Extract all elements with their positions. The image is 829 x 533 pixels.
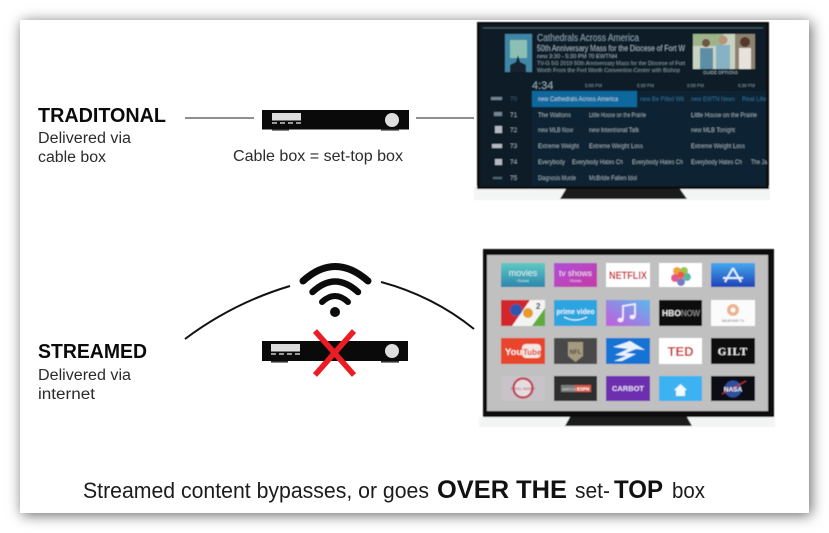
app tile: Netflix (606, 263, 650, 287)
text: delivered via cable box: Delivered via (38, 130, 131, 147)
guide listing rows: Extreme Weight Loss (589, 143, 644, 150)
app tile: app store (711, 263, 755, 287)
highlighted guide row: new Cathedrals Across America (538, 96, 618, 103)
app tile: prime video (554, 300, 597, 326)
guide options label: GUIDE OPTIONS (703, 70, 738, 75)
app tile: YouTube: Tube (523, 348, 542, 357)
guide listing rows (538, 112, 767, 182)
app tile: YouTube: You (505, 347, 522, 358)
app tile: movies: iTunes (517, 278, 529, 283)
app tile: NFL: NFL (570, 350, 582, 356)
bottom statement: set- (575, 478, 610, 503)
guide header text: TV-G 5G 2019 50th Anniversary Mass for the Diocese of Fort (537, 61, 686, 67)
guide clock and time row: 4:34 (532, 80, 553, 92)
channel numbers: 73 (510, 143, 518, 150)
channel numbers: 70 (510, 96, 518, 103)
guide listing rows: Extreme Weight Loss (691, 143, 746, 150)
bottom statement (83, 476, 706, 504)
bottom statement: OVER THE (437, 476, 567, 504)
connector line: cable box to TV (416, 117, 474, 119)
app tile: Rooster (711, 300, 755, 326)
caption: cable box equals set-top box: Cable box = set-top box (233, 148, 403, 165)
app tile: Netflix: NETFLIX (609, 270, 648, 282)
text: delivered via internet: Delivered via (38, 367, 131, 384)
guide clock and time row: 6:30 PM (738, 83, 755, 88)
preview photo (693, 34, 755, 69)
channel numbers: 72 (510, 127, 518, 134)
guide header text: 50th Anniversary Mass for the Diocese of Fort W (537, 44, 685, 53)
guide clock and time row: 5:30 PM (637, 83, 654, 88)
highlighted guide row: new Be Filled Wit (640, 96, 684, 103)
connector line: heading to cable box (185, 117, 254, 119)
guide listing rows: Little House on the Prairie (589, 112, 646, 119)
channel numbers (491, 96, 518, 182)
app tile: circular logo (501, 376, 545, 401)
app tile: movies (501, 263, 545, 287)
highlighted guide row: Real Life (742, 96, 766, 103)
highlighted guide row (532, 91, 766, 107)
app tile: Gilt: GILT (718, 346, 748, 358)
poster (505, 34, 532, 72)
guide header text: Cathedrals Across America (537, 33, 639, 44)
text: delivered via internet: internet (38, 386, 96, 403)
app tile: home (659, 376, 702, 401)
TV: streaming apps (479, 249, 775, 427)
guide listing rows: new MLB Tonight (691, 127, 735, 134)
app tile: circular logo: PIXEL NIGHT (511, 386, 536, 391)
channel numbers: 75 (510, 175, 518, 182)
app tile: NFL (554, 338, 597, 364)
text: delivered via internet (38, 367, 131, 403)
guide header text (537, 33, 686, 74)
bottom statement: Streamed content bypasses, or goes (83, 478, 429, 503)
app tile: HBO Now (659, 300, 702, 326)
app tile: Carbot: CARBOT (612, 384, 644, 393)
guide listing rows: Everybody Hates Ch (691, 159, 742, 166)
app tile: YouTube (501, 338, 545, 364)
guide header text: new 3:30 - 5:30 PM 70 EWTNH (537, 54, 617, 60)
app tile: HBO Now: NOW (681, 309, 700, 318)
guide listing rows: McBride Fallen Idol (589, 175, 637, 182)
guide listing rows: Everybody (538, 159, 566, 166)
highlighted guide row: new EWTN News (691, 96, 736, 103)
guide header text: Worth From the Fort Worth Convention Center with Bishop (537, 68, 680, 74)
app tile: HBO Now: HBO (662, 308, 681, 318)
app tile: NASA (711, 376, 755, 401)
guide listing rows: new Intentional Talk (589, 127, 640, 134)
icon: wifi (303, 266, 368, 317)
app tile: Sonic (501, 300, 545, 326)
app tile: prime video: prime video (556, 307, 595, 316)
app tile: Gilt (711, 338, 755, 364)
arc: heading to wifi (185, 286, 290, 339)
app tile: movies: movies (509, 268, 538, 278)
bottom statement: TOP (614, 476, 663, 504)
guide clock and time row (532, 80, 755, 92)
channel numbers: 71 (510, 112, 518, 119)
app tile: Watch ESPN (554, 376, 597, 401)
app tile: Rooster: WEATHER TV (722, 319, 745, 323)
app tile: tv shows: iTunes (570, 278, 581, 283)
channel numbers: 74 (510, 159, 518, 166)
guide listing rows: Diagnosis Murde (538, 175, 576, 182)
guide listing rows: Everybody Hates Ch (572, 159, 623, 166)
TV: traditional program guide (474, 22, 770, 200)
app tile: Carbot (606, 376, 650, 401)
heading: traditional: TRADITONAL (38, 104, 166, 127)
text: delivered via cable box (38, 130, 131, 166)
guide listing rows: The Waltons (538, 112, 572, 119)
guide listing rows: Little House on the Prairie (691, 112, 757, 119)
app tile: Watch ESPN: WATCH (562, 386, 576, 392)
app tile: TED: TED (668, 344, 694, 359)
app tile: music (606, 300, 650, 326)
app tile: tv shows (554, 263, 597, 287)
heading: streamed: STREAMED (38, 340, 147, 363)
app tile: Zillow (606, 338, 650, 364)
guide clock and time row: 5:00 PM (585, 83, 602, 88)
app tile: tv shows: tv shows (559, 268, 592, 278)
app tile: Sonic: 2 (536, 302, 541, 311)
guide listing rows: Everybody Hates Ch (632, 159, 683, 166)
app tile: Watch ESPN: ESPN (577, 386, 589, 392)
app tile: NASA: NASA (724, 386, 743, 394)
bottom statement: box (672, 478, 706, 503)
guide listing rows: The Ja (751, 159, 767, 166)
icon: cable box (262, 110, 409, 131)
guide listing rows: Extreme Weight (538, 143, 579, 150)
arc: wifi to TV (381, 282, 474, 329)
icon: crossed-out cable box (262, 331, 408, 375)
text: delivered via cable box: cable box (38, 149, 106, 166)
guide clock and time row: 6:00 PM (687, 83, 704, 88)
app tile: photos (659, 263, 702, 287)
guide listing rows: new MLB Now (538, 127, 573, 134)
app tile: TED (659, 338, 702, 364)
